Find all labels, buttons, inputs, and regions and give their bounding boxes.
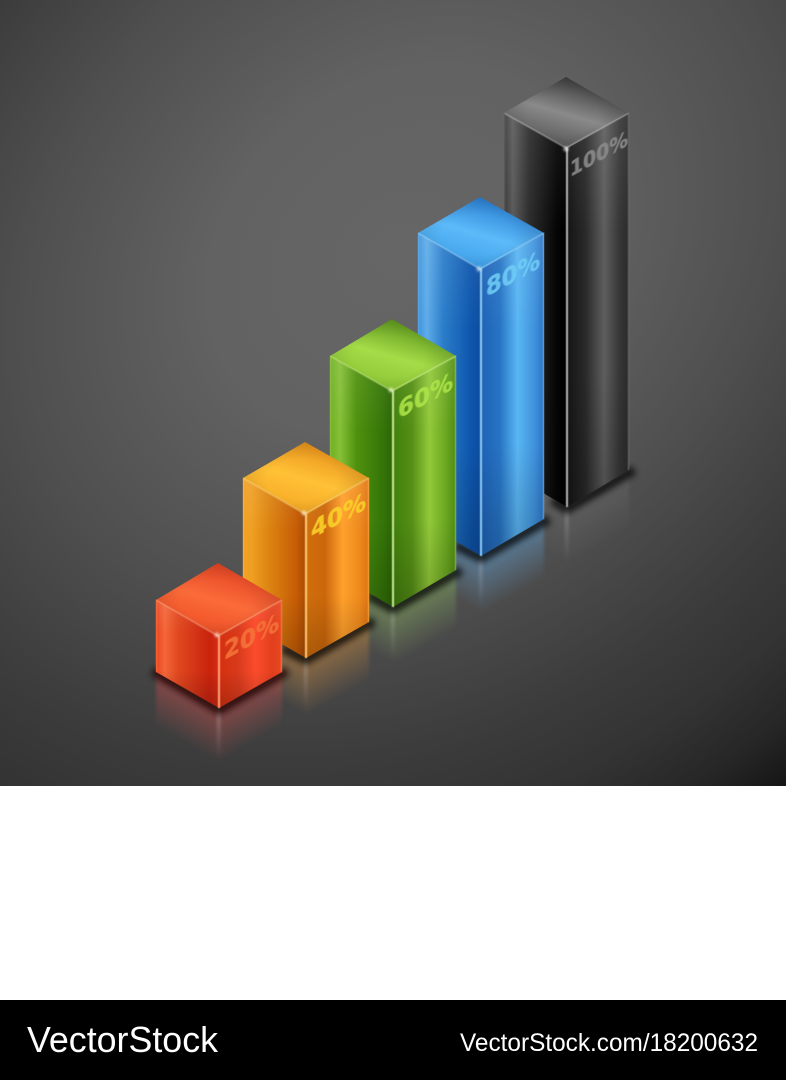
edge highlights: blue bar [418,233,544,556]
shadow: green bar [368,570,461,609]
left face: red bar [156,600,219,708]
right face: black bar [567,113,629,507]
top face: orange bar [243,442,369,514]
shadow: red bar [153,671,287,710]
shading overlays: green bar [330,319,456,607]
bar: 100% black [504,77,634,565]
top face: black bar [504,77,629,148]
shading overlays: black bar [504,77,629,507]
left face: blue bar [418,233,481,556]
bar: 60% green [330,319,461,665]
label: 100%: 100% [570,127,628,183]
corner glint: orange bar [302,511,306,515]
reflection: blue bar [418,519,544,614]
bar: 20% red [153,563,287,763]
label: 60%: 60% [398,367,453,426]
edge highlights: green bar [330,356,456,607]
shadow: blue bar [455,519,549,558]
right face: red bar [219,600,282,708]
reflection: red bar [156,671,282,763]
corner glint: blue bar [477,267,481,271]
label: 20%: 20% [224,608,279,667]
edge highlights: orange bar [243,478,369,658]
edge highlights: red bar [156,600,282,708]
watermark: brand name: VectorStock [27,1019,219,1060]
reflection: orange bar [243,621,369,716]
right face: blue bar [481,233,544,556]
corner glint: green bar [389,388,393,392]
label: 80%: 80% [486,246,540,304]
shading overlays: blue bar [418,197,544,556]
right face: green bar [393,356,456,607]
corner glint: red bar [215,633,219,637]
edge highlights: black bar [504,113,629,507]
reflection: black bar [504,470,629,565]
top face: green bar [330,319,456,391]
right face: orange bar [306,478,369,658]
shadow: black bar [552,470,634,509]
left face: green bar [330,356,393,607]
reflection: green bar [330,570,456,665]
shading overlays: red bar [156,563,282,708]
top face: blue bar [418,197,544,269]
top face: red bar [156,563,282,636]
bar: 80% blue [418,197,549,614]
watermark footer bar [0,1000,786,1080]
corner glint: black bar [564,147,568,151]
bar: 40% orange [243,442,374,716]
shadow: orange bar [282,621,374,660]
dark background panel [0,0,786,786]
shading overlays: orange bar [243,442,369,658]
left face: orange bar [243,478,306,658]
left face: black bar [504,113,567,507]
label: 40%: 40% [311,487,366,546]
watermark: image URL: VectorStock.com/18200632 [460,1029,758,1057]
